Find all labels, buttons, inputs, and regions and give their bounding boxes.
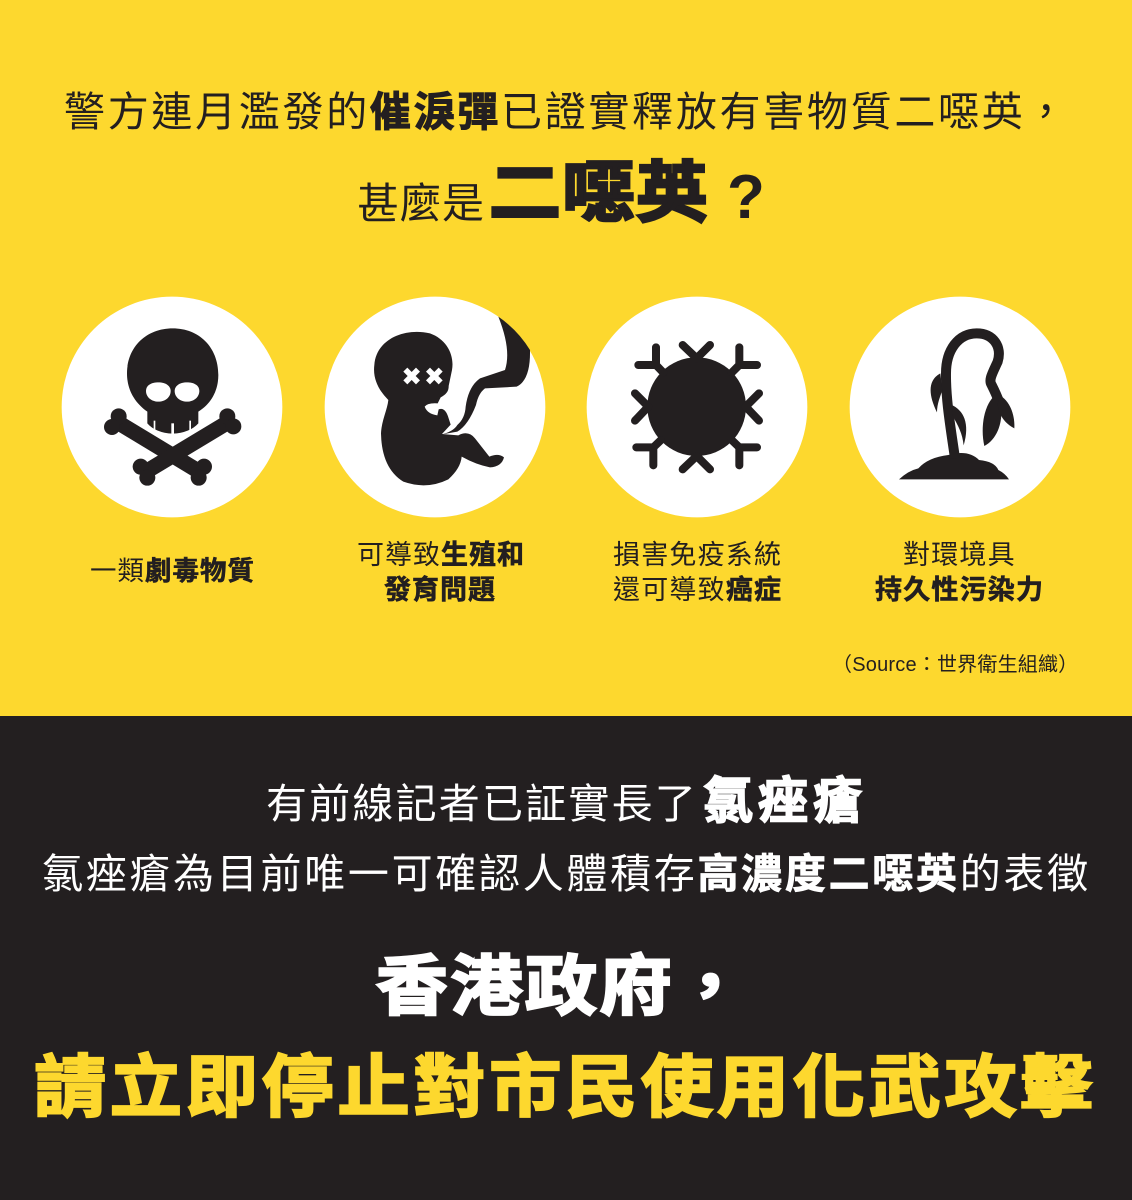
body line 1: 有前線記者已証實長了 [266, 781, 698, 827]
title line 2: 甚麼是 [357, 180, 485, 227]
label: immune damage and cancer [613, 540, 782, 605]
title line 2 [357, 156, 765, 232]
demand headline: Hong Kong government: 香港政府， [376, 950, 749, 1023]
body line 1: 氯痤瘡 [703, 773, 868, 829]
label: immune damage and cancer: 還可導致癌症 [613, 575, 782, 605]
label: reproductive and developmental problems [357, 540, 525, 605]
label: immune damage and cancer: 損害免疫系統 [613, 540, 782, 570]
body line 2: 氯痤瘡為目前唯一可確認人體積存高濃度二噁英的表徵 [42, 851, 1091, 897]
title line 1: 警方連月濫發的催淚彈已證實釋放有害物質二噁英， [64, 89, 1069, 135]
icon: wilting plant [850, 297, 1070, 517]
demand headline: stop chemical weapons: 請立即停止對市民使用化武攻擊 [34, 1050, 1096, 1126]
icon: immune cell [587, 297, 807, 517]
panel: black bottom section [0, 716, 1132, 1200]
label: persistent environmental pollution: 持久性污染力 [875, 575, 1044, 605]
title line 2: ? [727, 163, 765, 232]
label: reproductive and developmental problems: 可導致生殖和 [357, 540, 525, 570]
source note: （Source：世界衛生組織） [832, 653, 1078, 676]
label: reproductive and developmental problems: 發育問題 [384, 575, 496, 605]
label: persistent environmental pollution [875, 540, 1044, 605]
label: deadly substance: 一類劇毒物質 [90, 556, 255, 586]
body line 1 [266, 773, 868, 829]
panel: yellow top section [0, 0, 1132, 716]
icon: fetus [325, 297, 545, 517]
title line 2: 二噁英 [489, 156, 709, 230]
label: persistent environmental pollution: 對環境具 [903, 540, 1016, 570]
icon: skull and crossbones [62, 297, 282, 517]
